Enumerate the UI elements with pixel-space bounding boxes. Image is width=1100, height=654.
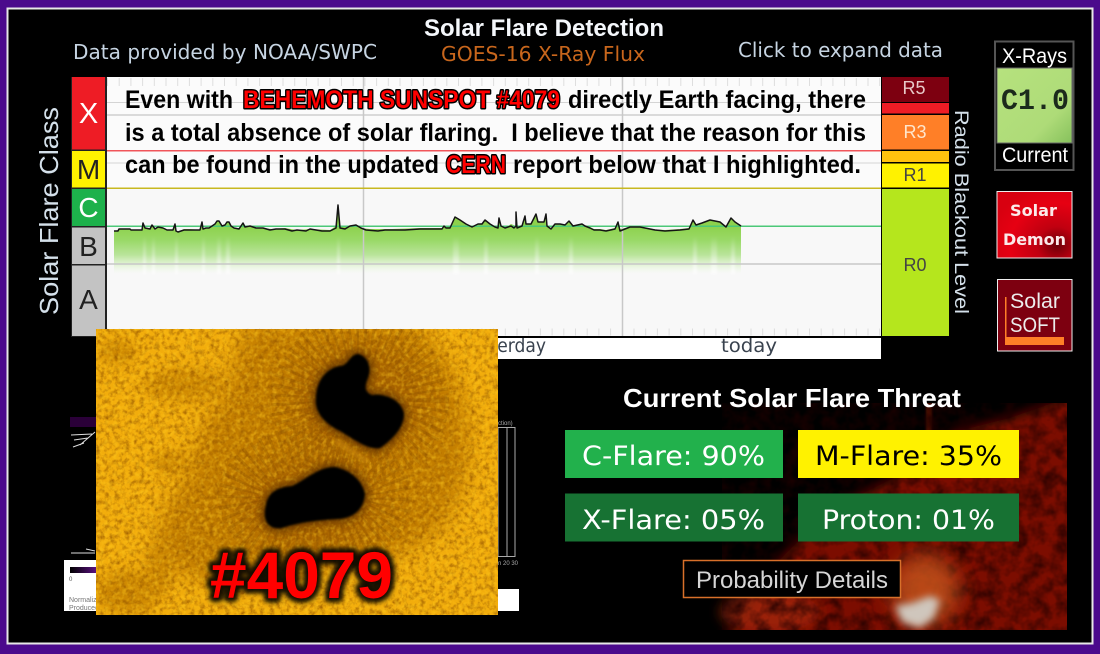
today label: today [721,335,777,357]
x-flare tile: X-Flare: 05% [582,505,765,536]
solar soft button: Solar [1010,290,1060,313]
annotation line 1: BEHEMOTH SUNSPOT #4079 [243,86,560,114]
class A [72,266,105,336]
flux area fill [114,205,741,274]
obscured chart remnants, left: 0 [69,577,73,583]
current label: Current [1002,144,1068,167]
R4 band [882,103,949,114]
data credit: Data provided by NOAA/SWPC [73,40,377,64]
sunspot number: #4079 [210,538,393,612]
solar soft button: SOFT [1010,314,1060,337]
class C [72,189,105,226]
annotation line 3: CERN [446,151,506,179]
time axis [107,335,881,359]
obscured chart remnants, left: Normalized [69,597,105,604]
obscured chart remnants, right: n 20 30 [498,561,519,567]
solar demon button: Demon [1003,230,1066,249]
R5: R5 [902,78,926,98]
expand link: Click to expand data [738,38,943,62]
umbra lower [265,467,365,528]
probability details button: Probability Details [696,567,888,594]
threshold lines [107,151,881,226]
x-rays label: X-Rays [1002,45,1067,68]
obscured chart remnants, left [64,417,105,612]
background sun image [713,403,1067,630]
annotation line 2: is a total absence of solar flaring. I believe that the reason for this [125,119,866,147]
annotation line 3 [125,151,861,179]
yesterday label: yesterday [461,335,546,357]
class X: X [79,98,98,130]
class X [72,77,105,150]
light bridge [335,440,368,462]
inner penumbra [265,354,404,528]
class B: B [79,231,98,262]
darker plage patches [96,340,225,614]
R0 [882,189,949,336]
R3: R3 [903,122,927,142]
solar demon button [997,192,1072,258]
flux streaks [143,236,735,274]
R0: R0 [903,255,927,275]
class M: M [77,154,100,185]
obscured chart remnants, left: Produced [69,605,99,612]
radio blackout scale [882,77,949,336]
umbra upper [316,354,404,448]
flare class scale [71,77,107,337]
c-flare tile: C-Flare: 90% [582,441,765,472]
solar soft button [998,280,1072,351]
R3 [882,115,949,150]
annotation line 3: report below that I highlighted. [513,151,861,179]
radial filaments [239,336,428,550]
class C: C [78,192,99,223]
reading tile: C1.0 [1001,85,1069,119]
x-ray flux chart [107,77,881,336]
solar demon button: Solar [1010,201,1057,220]
probability details button [684,560,900,598]
annotation line 1: directly Earth facing, there [568,86,866,114]
class M [72,151,105,188]
m-flare tile [798,430,1019,478]
R1: R1 [903,165,927,185]
x-flare tile [565,494,783,542]
overlay annotation [125,86,866,179]
sunspot number glow: #4079 [210,538,393,612]
main title: Solar Flare Detection [424,15,664,42]
granulation texture [96,329,498,615]
flux line [114,205,741,232]
x-rays current widget [995,42,1074,170]
annotation line 1: Even with [125,86,233,114]
R2 band [882,151,949,162]
right axis title: Radio Blackout Level [950,110,971,314]
obscured chart remnants, right: ction) [498,421,513,427]
annotation line 3: can be found in the updated [125,151,439,179]
c-flare tile [565,430,783,478]
proton tile: Proton: 01% [822,505,995,536]
m-flare tile: M-Flare: 35% [815,441,1002,472]
subtitle: GOES-16 X-Ray Flux [441,42,645,66]
obscured chart remnants, right [498,421,519,611]
proton tile [798,494,1019,542]
threat heading: Current Solar Flare Threat [623,383,961,413]
penumbra [156,325,469,586]
R5 [882,77,949,102]
class B [72,228,105,264]
R1 [882,164,949,188]
sunspot photo [96,325,498,615]
class A: A [79,284,98,315]
bright granulation [96,329,498,615]
y axis title: Solar Flare Class [34,107,64,315]
annotation line 1 [125,86,866,114]
